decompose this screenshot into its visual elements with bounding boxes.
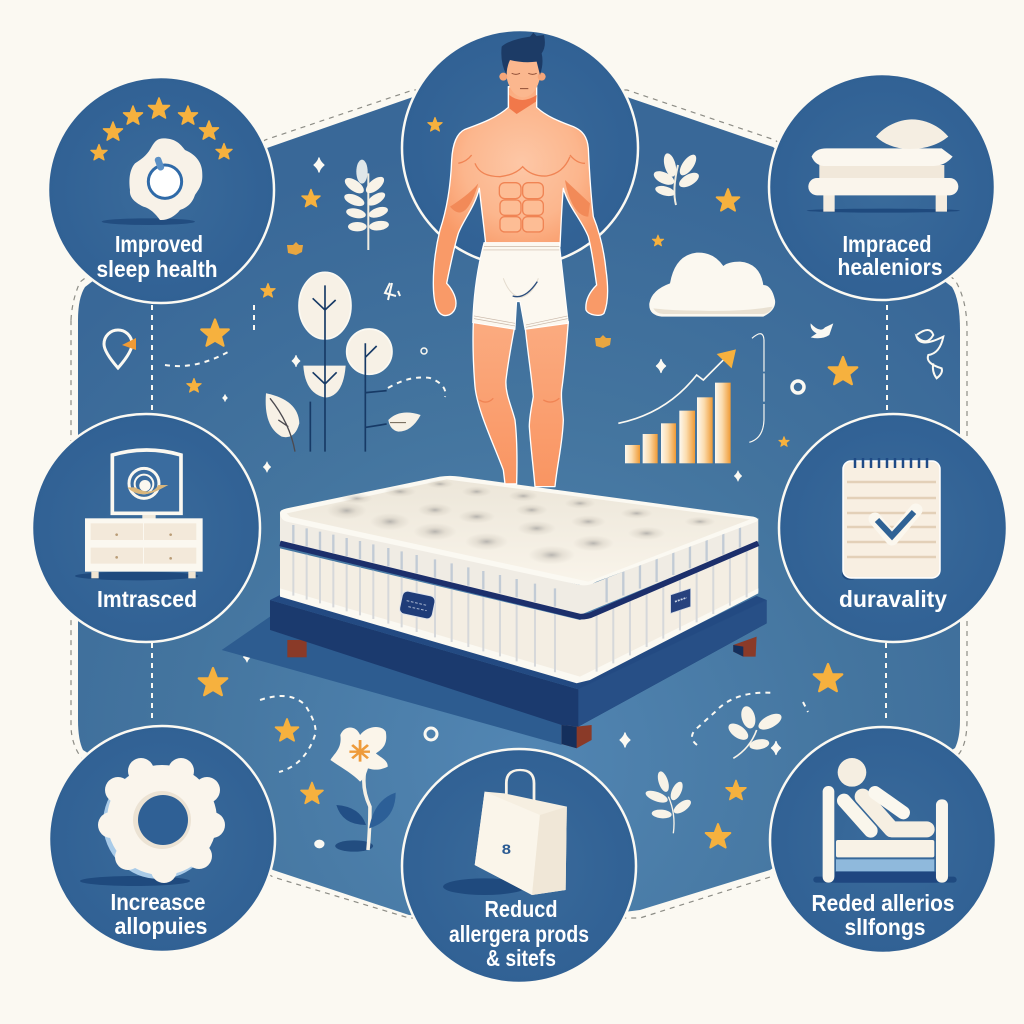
- navy piping stripe: [280, 543, 758, 617]
- panel: bottom left circle: [49, 726, 275, 952]
- text: reducd allergera prods & sitefs: [449, 896, 589, 971]
- icon: flower: [314, 727, 396, 852]
- text: reded allerios slifongs: [812, 890, 954, 940]
- icon: decorative stars: [187, 189, 857, 848]
- mattress upper band: [280, 513, 758, 615]
- text: increasce allopuies: Increasce: [110, 889, 206, 915]
- text: impraced healeniors: [838, 231, 942, 280]
- panel: top left circle: [48, 77, 274, 303]
- panel: bottom right circle: [770, 727, 996, 953]
- icon: dresser with mirror: [75, 450, 203, 580]
- icon: shopping bag: [443, 770, 567, 895]
- illustration: standing man: [433, 33, 608, 487]
- text: reducd allergera prods & sitefs: allergera prods: [449, 921, 589, 947]
- panel: middle right circle: [779, 414, 1007, 642]
- icon: sparkles and rings: [223, 158, 804, 754]
- man shorts: [473, 243, 568, 329]
- text: improved sleep health: sleep health: [96, 256, 218, 282]
- text: improved sleep health: [96, 231, 218, 282]
- text: reded allerios slifongs: Reded allerios: [812, 890, 954, 916]
- text: impraced healeniors: healeniors: [838, 254, 942, 280]
- text: reducd allergera prods & sitefs: Reducd: [484, 896, 558, 922]
- text: increasce allopuies: allopuies: [114, 913, 208, 939]
- icon: location pin: [104, 330, 136, 368]
- bed feet: [287, 637, 757, 748]
- man body: [433, 87, 608, 316]
- icon: fern sprig right: [652, 152, 701, 205]
- text: reded allerios slifongs: slIfongs: [844, 914, 926, 940]
- bed frame shadow: [222, 617, 562, 745]
- text: imtrasced: Imtrasced: [97, 586, 197, 612]
- icon: sleep blob with ring: [102, 138, 202, 225]
- icon: bed with pillow: [807, 119, 960, 213]
- panel: central blue hexagon backdrop: [71, 90, 967, 925]
- icon: scribble mark: [385, 283, 400, 300]
- man head: [499, 33, 546, 114]
- icon: cloud: [649, 253, 775, 317]
- bed frame: [270, 595, 767, 727]
- text: improved sleep health: Improved: [115, 231, 203, 257]
- icon: notepad with check: [842, 458, 940, 580]
- icon: trees and leaves: [266, 272, 421, 452]
- icon: shopping bag: 8: [502, 842, 511, 858]
- man legs: [473, 322, 568, 487]
- mattress label right: [671, 588, 691, 613]
- icon: fern sprig left: [342, 160, 390, 250]
- icon: star arc: [91, 98, 232, 160]
- text: impraced healeniors: Impraced: [842, 231, 932, 257]
- text: reducd allergera prods & sitefs: & sitefs: [486, 945, 556, 971]
- icon: gear ring: [80, 758, 225, 886]
- text: increasce allopuies: [110, 889, 208, 939]
- illustration: mattress on bed frame: [222, 476, 767, 748]
- panel: bottom centre circle: [402, 749, 636, 983]
- icon: leaf sprigs lower right: [644, 705, 784, 833]
- dashed connector lines: [152, 305, 887, 772]
- panel: top centre circle: [402, 30, 638, 266]
- mattress lower band: [280, 545, 758, 683]
- text: duravality: duravality: [839, 586, 947, 612]
- panel: middle left circle: [32, 414, 260, 642]
- bar chart with growth arrow: [618, 334, 764, 463]
- man muscle details: [450, 155, 590, 402]
- icon: person resting in bed: [813, 758, 957, 883]
- icon: bird and squiggle: [811, 323, 943, 378]
- mattress top: [280, 476, 758, 585]
- panel: top right circle: [769, 74, 995, 300]
- mattress label left: [399, 590, 436, 620]
